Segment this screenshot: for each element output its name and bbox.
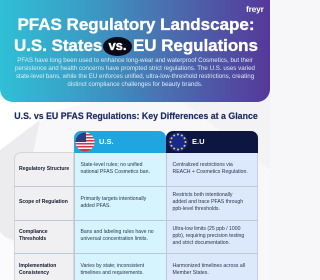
row: scope of regulation: Restricts both intentionally xyxy=(172,192,233,198)
intro text: PFAS have long been used to enhance long-wear and waterproof Cosmetics, but their xyxy=(17,57,253,64)
row: regulatory structure: REACH + Cosmetics Regulation. xyxy=(172,169,248,175)
row: compliance thresholds: Compliance xyxy=(19,229,48,235)
row: scope of regulation: Scope of Regulation xyxy=(19,199,68,205)
section heading: U.S. vs EU PFAS Regulations: Key Differences at a Glance xyxy=(14,111,258,121)
row: implementation consistency: Implementation xyxy=(19,263,56,269)
row: compliance thresholds: Ultra-low limits (25 ppb / 1000 xyxy=(172,226,240,232)
row: implementation consistency: Consistency xyxy=(19,270,49,276)
column backgrounds xyxy=(14,152,74,280)
icon: EU flag xyxy=(168,132,188,152)
row: scope of regulation: Primarily targets intentionally xyxy=(80,196,146,202)
icon: US flag xyxy=(75,132,95,152)
intro text: state-level bans, while the EU enforces unified, ultra-low-threshold restrictions, creating xyxy=(16,73,254,80)
row: compliance thresholds: Bans and labeling rules have no xyxy=(80,229,154,235)
row: implementation consistency: Member States. xyxy=(172,270,209,276)
column header: EU xyxy=(166,131,258,152)
label: U.S.: U.S. xyxy=(99,137,114,146)
row: implementation consistency xyxy=(19,263,245,276)
row: regulatory structure: national PFAS Cosmetics ban. xyxy=(80,169,150,175)
title: U.S. States xyxy=(14,36,102,55)
label: E.U: E.U xyxy=(192,137,205,146)
title xyxy=(14,15,258,56)
row: implementation consistency: timelines and requirements. xyxy=(80,270,144,276)
row: scope of regulation: added PFAS. xyxy=(80,203,111,209)
row: compliance thresholds: universal concentration limits. xyxy=(80,236,148,242)
row: scope of regulation: added and trace PFAS through xyxy=(172,199,243,205)
title: EU Regulations xyxy=(133,36,258,55)
header banner xyxy=(0,0,270,102)
logo: freyr: freyr xyxy=(246,4,264,14)
title: PFAS Regulatory Landscape: xyxy=(17,15,255,34)
intro text: persistence and health concerns have prompted strict regulations. The U.S. uses varied xyxy=(15,65,255,72)
row: implementation consistency: Harmonized timelines across all xyxy=(172,263,245,269)
row: compliance thresholds xyxy=(19,226,244,246)
row: implementation consistency: Varies by state; inconsistent xyxy=(80,263,144,269)
vs. badge xyxy=(103,37,132,56)
row: compliance thresholds: and strict documentation. xyxy=(172,240,230,246)
row: regulatory structure xyxy=(19,162,248,175)
row: compliance thresholds: Thresholds xyxy=(19,236,46,242)
row: regulatory structure: Regulatory Structure xyxy=(19,166,69,172)
comparison table xyxy=(14,131,258,280)
intro text: distinct compliance challenges for beauty brands. xyxy=(67,81,203,88)
row: regulatory structure: Centralized restrictions via xyxy=(172,162,233,168)
row: scope of regulation xyxy=(19,192,243,212)
row: compliance thresholds: ppb), requiring precision testing xyxy=(172,233,244,239)
column header: U.S. xyxy=(74,131,166,152)
row: regulatory structure: State-level rules; no unified xyxy=(80,162,143,168)
row: scope of regulation: ppb-level thresholds. xyxy=(172,206,220,212)
intro text xyxy=(15,57,255,88)
background pattern xyxy=(0,121,40,240)
vs. badge: vs. xyxy=(108,38,127,53)
